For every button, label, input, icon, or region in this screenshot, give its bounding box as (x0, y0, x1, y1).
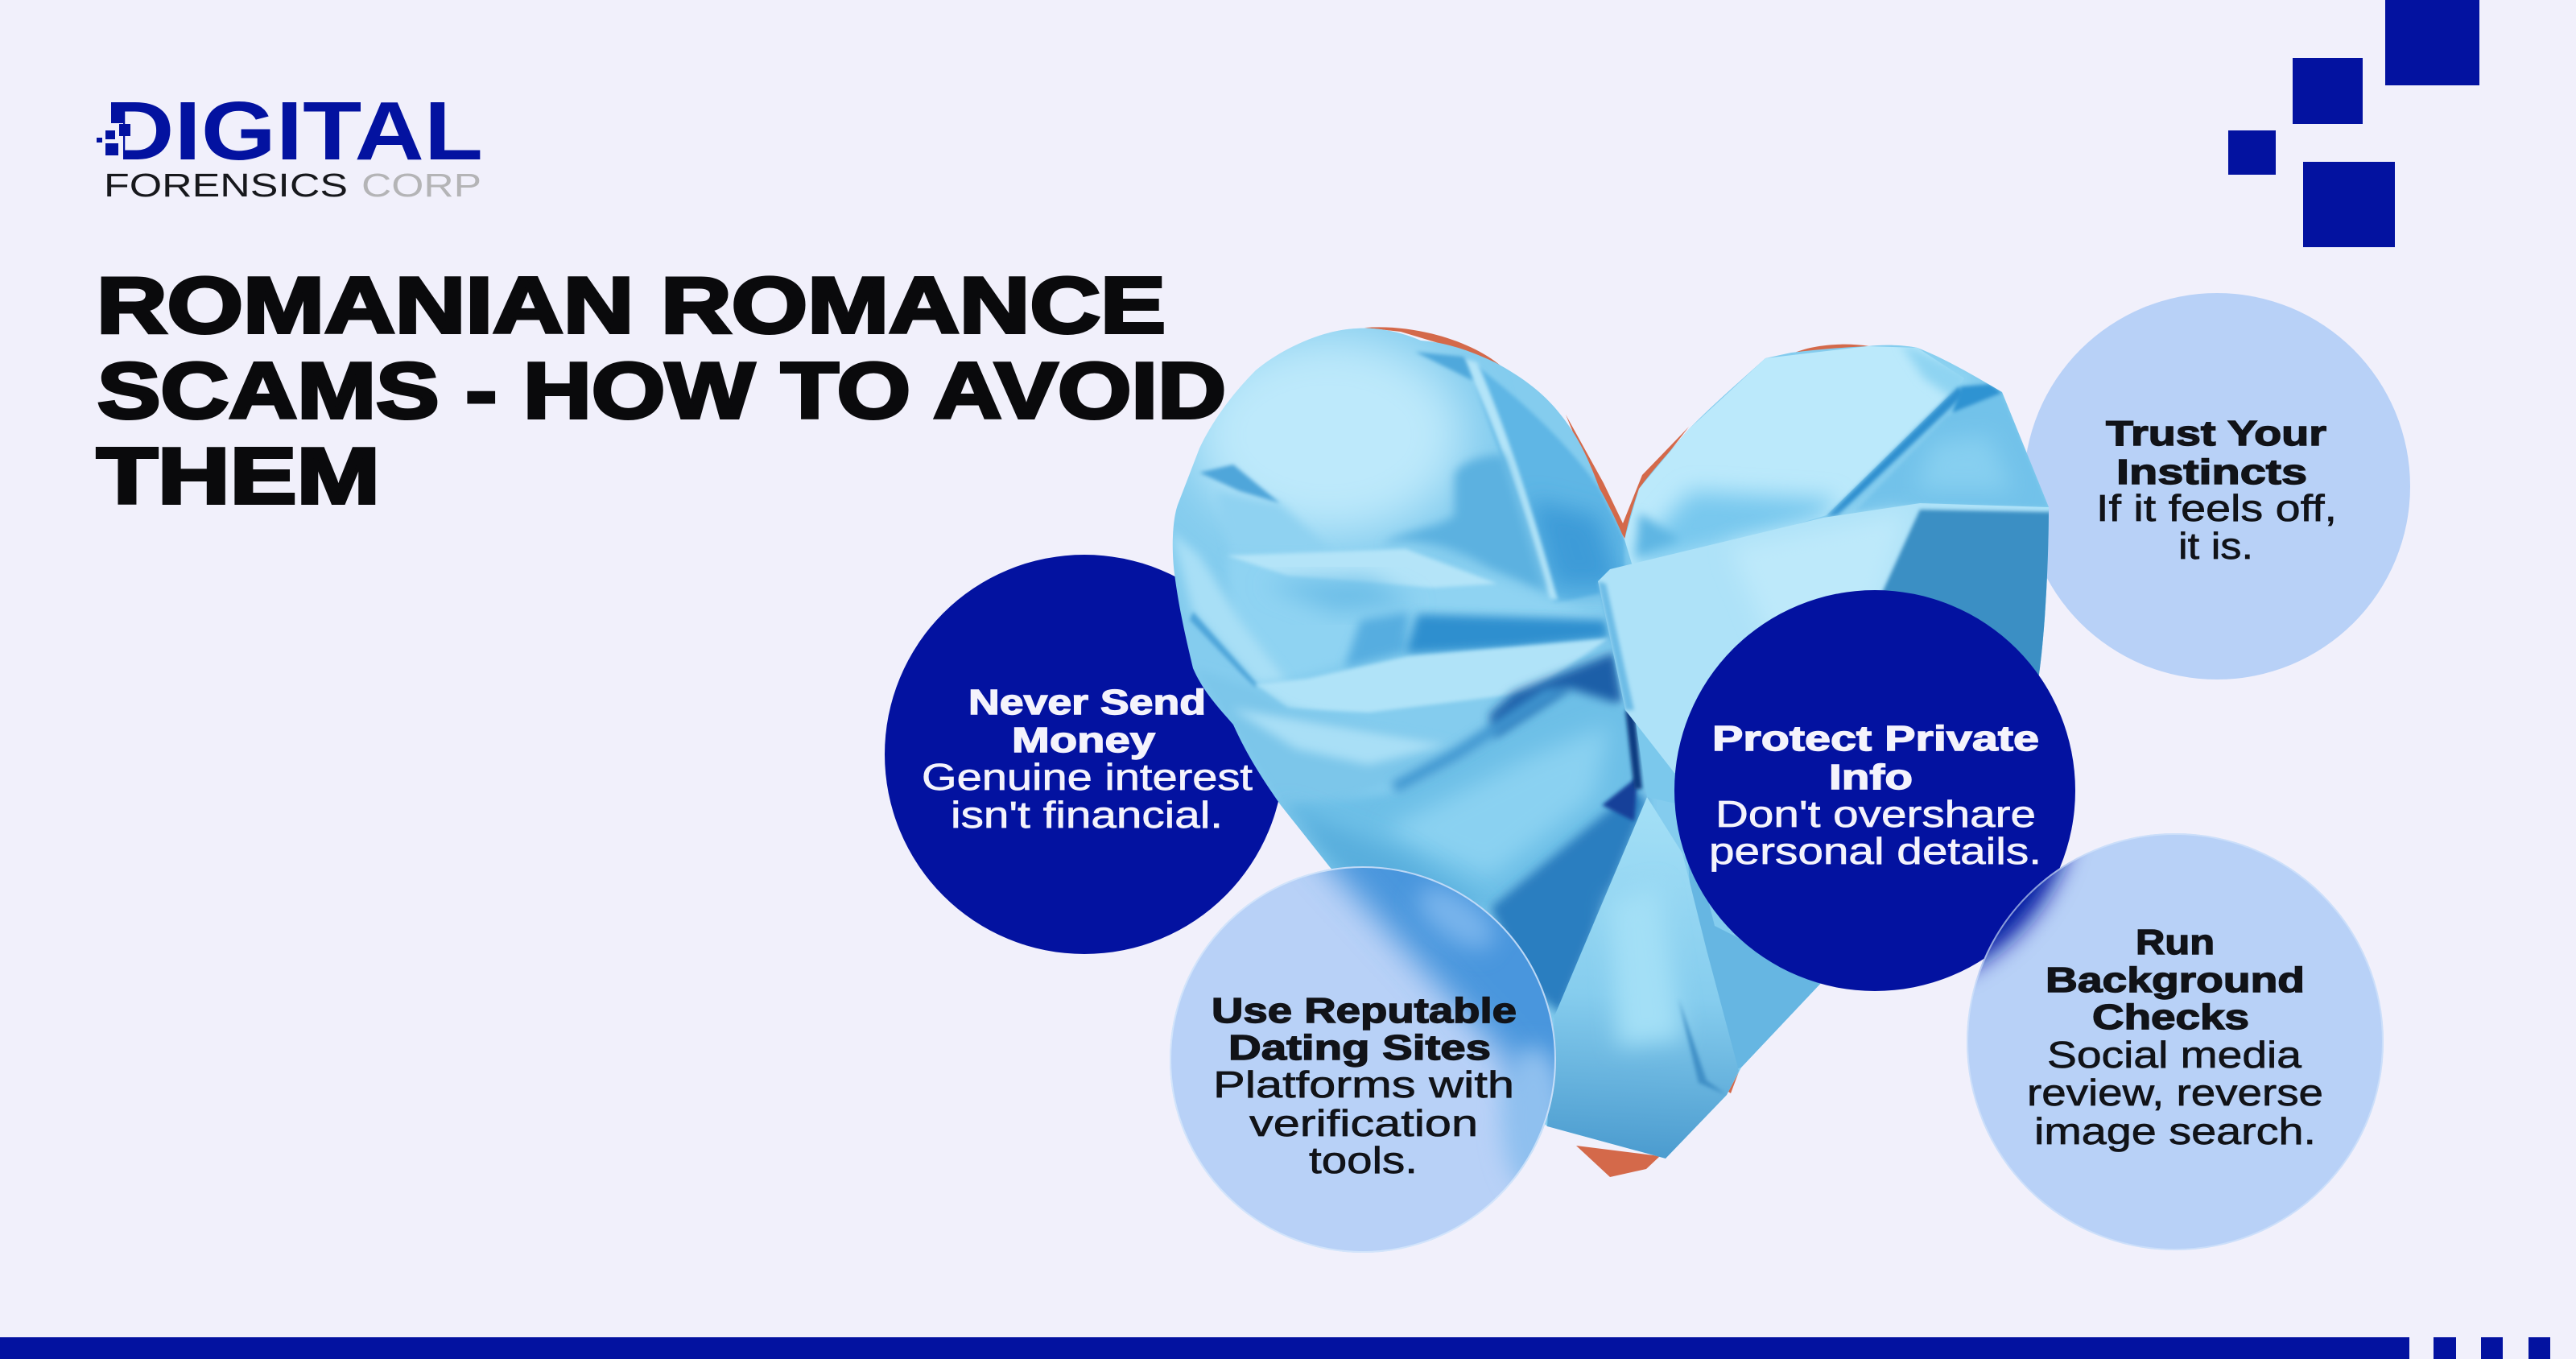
body: don't overshare: personal details. (1709, 830, 2041, 872)
callout circle: never send money (885, 555, 1284, 954)
heading: protect private info: Protect Private (1712, 719, 2039, 758)
body: social media review: image search. (2034, 1110, 2316, 1152)
heading: trust your instincts: Trust Your (2106, 414, 2326, 453)
tail of the fabric (1688, 863, 1821, 1068)
heading: never send money: Money (1012, 721, 1156, 760)
heading: run background checks: Checks (2092, 998, 2249, 1037)
title: SCAMS - HOW TO AVOID (97, 346, 1226, 435)
title: THEM (97, 432, 380, 520)
body: if it feels off: If it feels off, (2096, 487, 2337, 529)
heading: protect private info (1712, 719, 2039, 797)
logo: Digital Forensics Corp: DIGITAL (105, 85, 483, 177)
logo: Digital Forensics Corp: CORP (361, 167, 481, 204)
title: ROMANIAN ROMANCE (97, 261, 1166, 349)
right lobe (1624, 346, 1964, 572)
callout circle: use reputable dating sites (1170, 866, 1556, 1253)
body: don't overshare: Don't overshare (1715, 793, 2036, 835)
heading: protect private info: Info (1829, 758, 1913, 797)
body: platforms with verification tools: Platforms with (1213, 1064, 1514, 1105)
heading: use reputable dating sites (1212, 991, 1517, 1068)
title (97, 261, 1226, 520)
main band toward knot (1230, 562, 1583, 675)
body: don't overshare (1709, 793, 2041, 872)
heart wrapped in blue fabric (1171, 327, 2053, 1177)
heading: never send money (968, 683, 1206, 760)
callout circle: run background checks (1967, 833, 2384, 1250)
body: if it feels off (2096, 487, 2337, 567)
left lobe fold band (1464, 357, 1624, 604)
lower left folds (1195, 674, 1409, 821)
heading: trust your instincts: Instincts (2116, 452, 2307, 492)
body: genuine interest: Genuine interest (922, 756, 1253, 798)
heading: run background checks (2046, 923, 2305, 1037)
second ridge (1255, 638, 1609, 713)
heading: trust your instincts (2106, 414, 2326, 492)
logo: Digital Forensics Corp (97, 85, 483, 204)
dark wedge (1490, 789, 1647, 1014)
red heart peeking out (1364, 327, 1869, 1177)
left lobe highlight (1191, 334, 1465, 535)
body: social media review (2027, 1034, 2323, 1152)
heading: use reputable dating sites: Use Reputable (1212, 991, 1517, 1031)
body: platforms with verification tools: tools. (1309, 1139, 1418, 1181)
left lobe shadow (1381, 455, 1546, 592)
body: genuine interest (922, 756, 1253, 836)
body: social media review: Social media (2047, 1034, 2301, 1076)
bottom bar (0, 1337, 2550, 1359)
left edge strip (1171, 531, 1288, 684)
heading: run background checks: Run (2136, 923, 2215, 962)
body: if it feels off: it is. (2178, 525, 2253, 567)
body: genuine interest: isn't financial. (951, 794, 1223, 836)
heading: run background checks: Background (2046, 960, 2305, 1000)
logo: Digital Forensics Corp: FORENSICS (104, 167, 348, 204)
callout circle: protect private info (1674, 590, 2075, 991)
left crease (1220, 491, 1317, 543)
ribbon across right lobe (1598, 503, 2049, 773)
body: platforms with verification tools: verification (1249, 1102, 1478, 1144)
heading: use reputable dating sites: Dating Sites (1228, 1028, 1491, 1068)
decorative squares top right (2228, 0, 2479, 247)
heading: never send money: Never Send (968, 683, 1206, 722)
callout circle: trust your instincts (2024, 293, 2410, 680)
body: platforms with verification tools (1213, 1064, 1514, 1181)
body: social media review: review, reverse (2027, 1072, 2323, 1113)
